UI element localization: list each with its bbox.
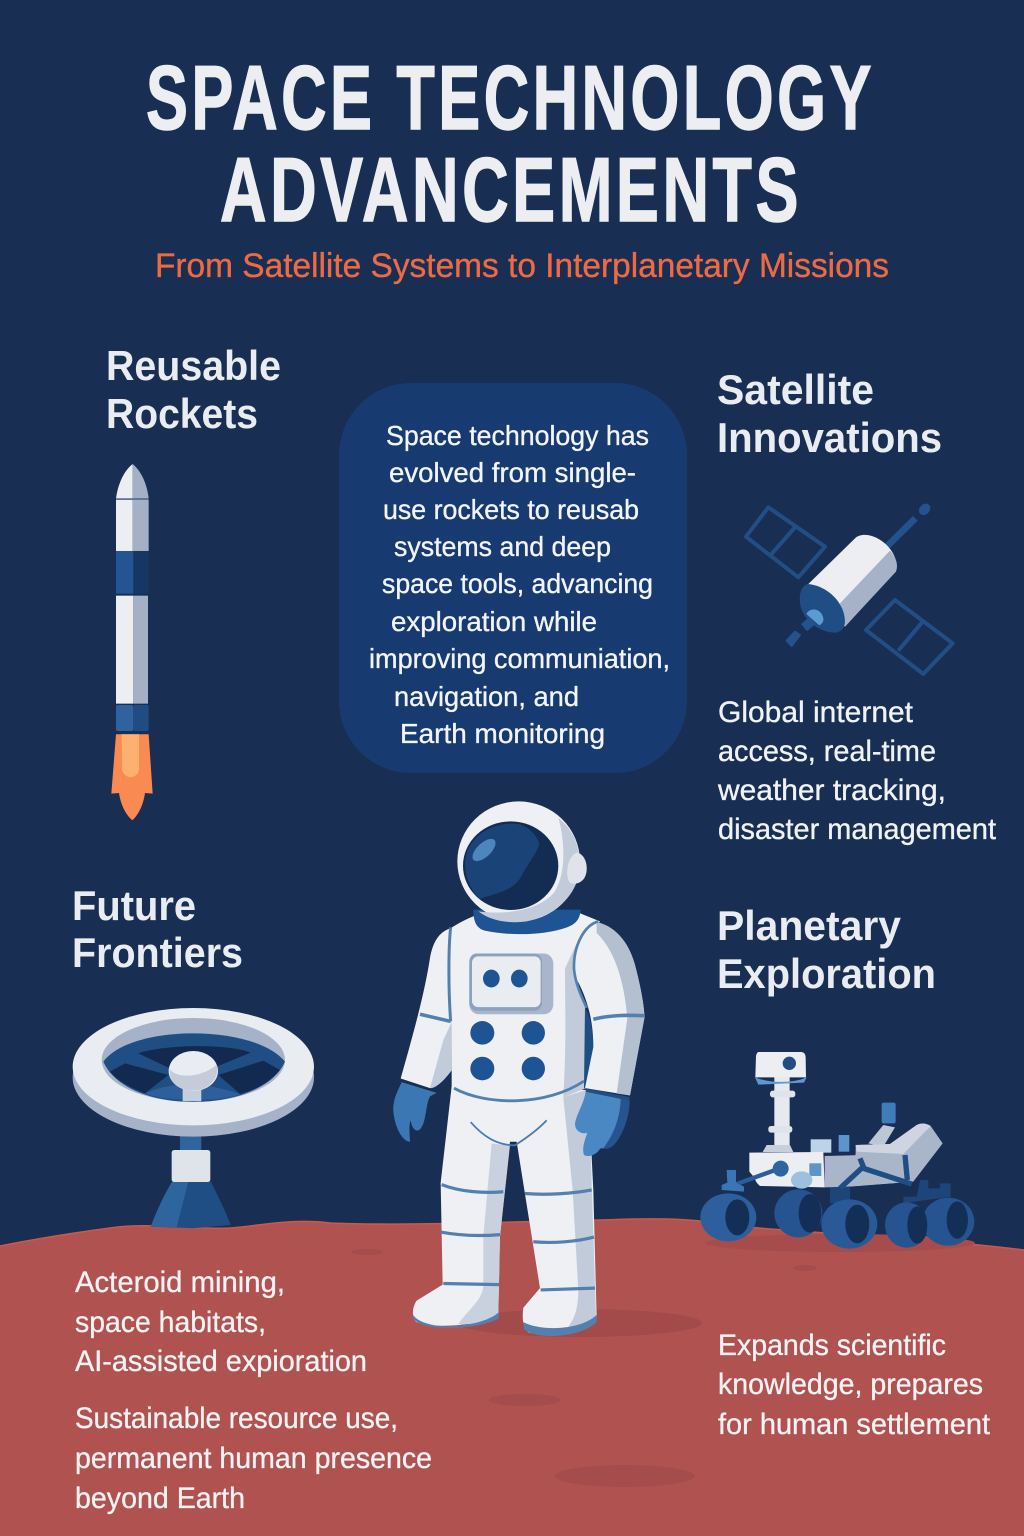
text: satellite description: weather tracking, — [717, 774, 946, 807]
sub: arms — [401, 927, 453, 1088]
text: satellite description — [717, 696, 997, 846]
heading: planetary exploration: Exploration — [717, 950, 936, 997]
center text panel — [339, 383, 687, 773]
astronaut — [393, 801, 644, 1336]
center text panel: space tools, advancing — [382, 568, 653, 599]
text: planetary exploration description: for human settlement — [718, 1408, 991, 1441]
sub: chest pack — [469, 954, 553, 1014]
title — [146, 48, 875, 241]
sub: chest buttons — [470, 1021, 545, 1080]
title: ADVANCEMENTS — [220, 140, 802, 241]
text: future frontiers list: Acteroid mining, — [75, 1266, 285, 1299]
text: future frontiers list: space habitats, — [75, 1306, 266, 1339]
text: planetary exploration description — [718, 1329, 991, 1441]
heading: future frontiers — [72, 882, 243, 976]
text: future frontiers list: AI-assisted expioration — [75, 1345, 367, 1378]
text: planetary exploration description: Expands scientific — [718, 1329, 946, 1362]
text: future frontiers list — [75, 1266, 367, 1378]
mars ground — [0, 1219, 1024, 1536]
heading: reusable rockets: Reusable — [106, 342, 281, 389]
icon: rover — [700, 1052, 974, 1249]
sub: gloves — [393, 1082, 629, 1156]
heading: planetary exploration: Planetary — [717, 902, 902, 949]
heading: satellite innovations: Satellite — [717, 366, 874, 413]
center text panel: use rockets to reusab — [383, 494, 639, 525]
text: future frontiers impact: permanent human presence — [75, 1442, 432, 1475]
center text panel: evolved from single- — [389, 457, 636, 488]
center text panel: systems and deep — [394, 531, 611, 562]
icon: satellite — [746, 501, 953, 674]
center text panel: Space technology has — [386, 420, 649, 451]
sub: collar — [473, 910, 581, 934]
text: satellite description: Global internet — [718, 696, 914, 729]
center text panel: improving communiation, — [369, 643, 670, 674]
center text panel: exploration while — [391, 606, 597, 637]
text: future frontiers impact: Sustainable resource use, — [75, 1402, 398, 1435]
center text panel: Earth monitoring — [400, 718, 605, 749]
heading: satellite innovations — [717, 366, 942, 461]
heading: satellite innovations: Innovations — [717, 414, 942, 461]
heading: future frontiers: Future — [72, 882, 196, 929]
text: satellite description: access, real-time — [718, 735, 936, 768]
subtitle: From Satellite Systems to Interplanetary Missions — [155, 247, 889, 285]
sub: helmet — [457, 801, 587, 922]
icon: rocket — [111, 464, 153, 820]
sub: torso — [452, 913, 600, 1102]
heading: reusable rockets: Rockets — [106, 390, 258, 437]
center text panel: navigation, and — [394, 681, 579, 712]
heading: reusable rockets — [106, 342, 281, 437]
heading: planetary exploration — [717, 902, 936, 997]
text: future frontiers impact: beyond Earth — [75, 1482, 245, 1515]
icon: satellite dish wheel — [73, 1008, 314, 1228]
heading: future frontiers: Frontiers — [72, 929, 243, 976]
text: satellite description: disaster management — [718, 813, 997, 846]
text: future frontiers impact — [75, 1402, 432, 1515]
text: planetary exploration description: knowledge, prepares — [718, 1368, 983, 1401]
